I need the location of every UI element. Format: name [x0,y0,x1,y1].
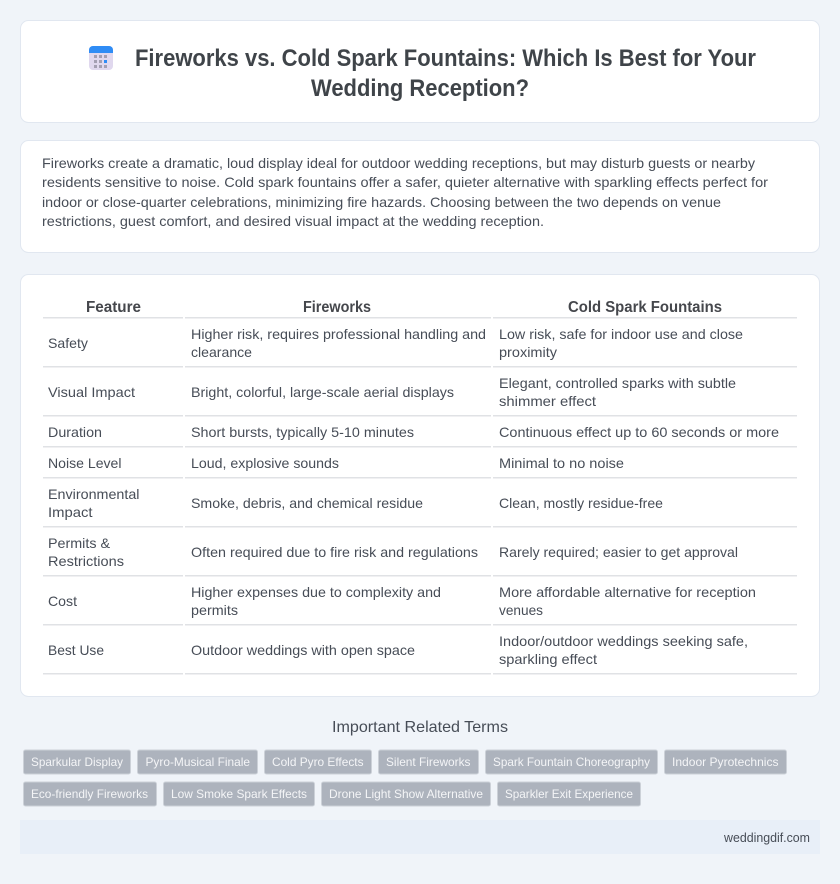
summary text: restrictions, guest comfort, and desired visual impact at the wedding reception. [42,213,544,229]
tag: Pyro-Musical Finale [146,755,250,769]
title: Wedding Reception? [311,75,529,102]
row: environmental impact: Impact [48,504,93,520]
row: noise level: Loud, explosive sounds [191,455,339,471]
row: duration: Duration [48,424,102,440]
tag: Sparkler Exit Experience [505,787,633,801]
title [135,45,756,102]
table header row: Fireworks [303,299,371,316]
row: best use: Best Use [48,642,104,658]
row: best use: Outdoor weddings with open space [191,642,415,658]
row: visual impact [43,375,797,416]
tag: Spark Fountain Choreography [493,755,650,769]
tag: Silent Fireworks [386,755,470,769]
summary text: indoor or close-quarter celebrations, minimizing fire hazards. Choosing between the two depends on venue [42,194,721,210]
row: cost [43,584,797,626]
tag [486,750,658,774]
summary panel [20,140,820,252]
row: permits and restrictions: Restrictions [48,553,124,569]
row: environmental impact: Environmental [48,486,140,502]
row: visual impact: Elegant, controlled sparks with subtle [499,375,736,391]
table header row [43,299,797,318]
tag [138,750,258,774]
tag [498,782,640,806]
row: cost: venues [499,602,543,618]
tag [322,782,490,806]
row: permits and restrictions: Often required due to fire risk and regulations [191,544,478,560]
row: cost: More affordable alternative for reception [499,584,756,600]
tag [264,750,372,774]
tag: Low Smoke Spark Effects [171,787,307,801]
related terms tags [24,750,786,806]
tag: Indoor Pyrotechnics [672,755,778,769]
tag [378,750,478,774]
row: duration: Short bursts, typically 5-10 minutes [191,424,414,440]
summary text [42,155,768,229]
row: safety: Low risk, safe for indoor use and close [499,326,743,342]
row: visual impact: Bright, colorful, large-scale aerial displays [191,384,454,400]
table header row: Cold Spark Fountains [568,299,722,316]
row: noise level: Minimal to no noise [499,455,624,471]
row: permits and restrictions: Rarely required; easier to get approval [499,544,738,560]
row: environmental impact: Clean, mostly residue-free [499,495,663,511]
page header card [20,20,820,122]
row: safety: Higher risk, requires professional handling and [191,326,486,342]
row: cost: Cost [48,593,77,609]
tag [664,750,786,774]
row: safety: clearance [191,344,252,360]
row: best use [43,633,797,674]
row: cost: permits [191,602,238,618]
row: noise level [43,455,797,478]
row: cost: Higher expenses due to complexity and [191,584,441,600]
row: noise level: Noise Level [48,455,122,471]
icon: calendar [89,46,113,70]
row: safety [43,326,797,368]
row: best use: Indoor/outdoor weddings seeking safe, [499,633,748,649]
row: permits and restrictions: Permits & [48,535,111,551]
row: safety: proximity [499,344,557,360]
footer bar: weddingdif.com [723,831,810,845]
tag: Cold Pyro Effects [272,755,364,769]
footer bar [20,820,820,854]
row: visual impact: shimmer effect [499,393,596,409]
title: Fireworks vs. Cold Spark Fountains: Which Is Best for Your [135,45,756,72]
table header row: Feature [86,299,141,316]
tag: Drone Light Show Alternative [329,787,483,801]
tag [24,782,156,806]
related terms heading: Important Related Terms [332,719,508,736]
row: safety: Safety [48,335,88,351]
tag: Sparkular Display [31,755,123,769]
row: best use: sparkling effect [499,651,597,667]
row: duration: Continuous effect up to 60 seconds or more [499,424,779,440]
tag [24,750,130,774]
row: environmental impact: Smoke, debris, and chemical residue [191,495,423,511]
summary text: Fireworks create a dramatic, loud display ideal for outdoor wedding receptions, but may disturb guests or nearby [42,155,755,171]
comparison table panel [20,274,820,696]
summary text: residents sensitive to noise. Cold spark fountains offer a safer, quieter alternative with sparkling effects perfect for [42,174,768,190]
row: visual impact: Visual Impact [48,384,135,400]
row: environmental impact [43,486,797,528]
row: permits and restrictions [43,535,797,576]
row: duration [43,424,797,448]
tag [164,782,314,806]
tag: Eco-friendly Fireworks [31,787,148,801]
